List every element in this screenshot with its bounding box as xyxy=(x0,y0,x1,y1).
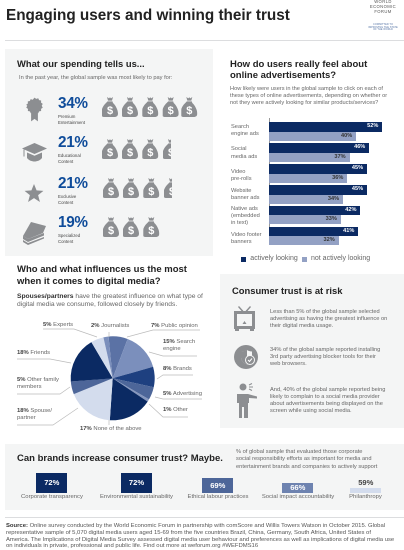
label: social media ads: media ads xyxy=(231,154,257,160)
bar: video active 45% xyxy=(269,164,367,174)
stat: 21% exclusive content: Exclusive xyxy=(58,194,76,199)
pie label: spouse: partner xyxy=(17,415,36,421)
stat box: environmental sustainability 72% xyxy=(121,473,152,493)
source note: on individuals in private, professional and public life. Find out more at weforum.org #WEFDMS16 xyxy=(6,543,258,549)
heading: spending: What our spending tells us... xyxy=(17,58,145,69)
bar: website active 45%: 45% xyxy=(352,186,363,192)
bar: search passive 40%: 40% xyxy=(341,133,352,139)
text: influences intro: digital media we consume, followed closely by friends. xyxy=(17,301,177,308)
pie chart: influences xyxy=(17,328,202,426)
caption: philanthropy: Philanthropy xyxy=(349,494,382,500)
icon row: money bags 19% xyxy=(103,217,160,237)
pie label: search engine: engine xyxy=(163,346,181,352)
bar: video passive 36%: 36% xyxy=(332,175,343,181)
stat: 34% premium entertainment xyxy=(58,95,88,125)
icon row: money bags 21% exclusive xyxy=(103,178,172,198)
text: advertising influence: their digital media usage. xyxy=(270,323,333,329)
stat: 21% educational content xyxy=(58,134,88,164)
stat: 19% specialized content: Content xyxy=(58,239,73,244)
label: native ads xyxy=(231,206,260,226)
text: brands description xyxy=(236,449,377,471)
text: brands description: % of global sample that evaluated those corporate xyxy=(236,449,362,455)
text: advertising influence xyxy=(270,309,387,329)
title: Engaging users and winning their trust xyxy=(6,7,290,24)
caption: environmental sustainability: Environmental sustainability xyxy=(100,494,173,500)
heading: consumer trust: Consumer trust is at risk xyxy=(232,285,342,296)
label: video footer banners: Video footer xyxy=(231,232,262,238)
stat box: social impact 66%: 66% xyxy=(290,483,305,492)
text: online ads intro: How likely were users in the global sample to click on each of xyxy=(230,86,383,92)
pie label: advertising: 5% Advertising xyxy=(163,390,202,396)
stat box: environmental sustainability 72%: 72% xyxy=(129,478,144,487)
stat box: corporate transparency 72%: 72% xyxy=(44,478,59,487)
icon: star xyxy=(24,184,44,202)
text: advertising influence: advertising as having the greatest influence on xyxy=(270,316,387,322)
text: spending intro: In the past year, the global sample was most likely to pay for: xyxy=(19,75,172,81)
stat box: ethical labour practices 69%: 69% xyxy=(210,481,225,490)
legend: not actively looking xyxy=(311,255,370,262)
stat: 34% premium entertainment: Entertainment xyxy=(58,120,85,125)
pie label: journalists: 2% Journalists xyxy=(91,322,129,328)
icon row: money bags 21% educational xyxy=(102,139,171,159)
stat box: corporate transparency 72% xyxy=(36,473,67,493)
icon: shield check xyxy=(234,345,258,369)
heading: online ads: online advertisements? xyxy=(230,70,336,81)
stat box: social impact 66% xyxy=(282,483,313,493)
source note: representative sample of 5,070 digital media users aged 15-69 from the five countries Brazil, China, Germany, South Africa, United States of xyxy=(6,530,371,536)
bar: native active 42% xyxy=(269,206,360,215)
bar: social passive 37% xyxy=(269,153,350,162)
label: native ads: Native ads xyxy=(231,206,258,212)
stat: 34% premium entertainment: 34% xyxy=(58,95,88,112)
bar: social active 46%: 46% xyxy=(354,144,365,150)
text: brands description: social responsibility efforts as important for media and xyxy=(236,456,372,462)
label: search engine ads: Search xyxy=(231,124,249,130)
bar: video active 45%: 45% xyxy=(352,165,363,171)
bar: native active 42%: 42% xyxy=(345,207,356,213)
stat box: ethical labour practices 69% xyxy=(202,478,233,493)
text: complaints: likely to complain to a social media provider xyxy=(270,394,380,400)
logo: World Economic Forum xyxy=(368,0,398,31)
label: video pre-rolls xyxy=(231,169,252,182)
text: advertising influence: Less than 5% of the global sample selected xyxy=(270,309,380,315)
bar: native passive 33%: 33% xyxy=(326,216,337,222)
text: influences intro xyxy=(17,293,203,308)
stat: 21% exclusive content: 21% xyxy=(58,175,88,192)
source note xyxy=(6,523,394,550)
logo: World Economic Forum: FORUM xyxy=(374,9,392,14)
bar: website active 45% xyxy=(269,185,367,195)
text: ad blocker: 3rd party advertising blocker tools for their xyxy=(270,354,376,360)
legend: actively looking xyxy=(250,255,298,262)
bar: search active 52% xyxy=(269,122,382,132)
source note: America. The Implications of Digital Media Survey assessed digital media user behaviour and preferences as well as implications of digital media use xyxy=(6,537,394,543)
text: online ads intro xyxy=(230,86,388,106)
label: native ads: (embedded xyxy=(231,213,260,219)
bar: footer active 41% xyxy=(269,227,358,236)
pie label: friends: 18% Friends xyxy=(17,350,50,356)
bar: native passive 33% xyxy=(269,215,341,224)
stat: 21% educational content: Educational xyxy=(58,153,81,158)
text: ad blocker: 34% of the global sample reported installing xyxy=(270,347,380,353)
text: complaints: about advertisements being displayed on the xyxy=(270,401,383,407)
caption: social impact accountability: Social impact accountability xyxy=(262,494,334,500)
text: complaints: screen while using social media. xyxy=(270,408,352,414)
bar: social passive 37%: 37% xyxy=(334,154,346,160)
stat: 21% exclusive content xyxy=(58,175,88,205)
caption: corporate transparency: Corporate transparency xyxy=(21,494,83,500)
bar: search active 52%: 52% xyxy=(367,123,378,129)
icon: graduation cap xyxy=(22,143,47,162)
bar: social active 46% xyxy=(269,143,369,153)
pie label: brands: 8% Brands xyxy=(163,366,192,372)
pie label: other: 1% Other xyxy=(163,407,188,413)
label: native ads: in text) xyxy=(231,220,248,226)
pie label: other family xyxy=(17,376,59,390)
text: online ads intro: not they were actively looking for similar products/services? xyxy=(230,100,378,106)
logo: World Economic Forum: OF THE WORLD xyxy=(373,28,393,31)
label: social media ads: Social xyxy=(231,146,246,152)
caption: ethical labour practices: Ethical labour practices xyxy=(188,494,248,500)
text: complaints xyxy=(270,386,385,415)
pie label: search engine xyxy=(163,339,195,352)
pie label: search engine: 15% Search xyxy=(163,339,195,345)
stat: 19% specialized content xyxy=(58,214,88,244)
text: brands description: entertainment brands and companies to actively support xyxy=(236,464,377,470)
label: search engine ads xyxy=(231,124,259,137)
heading: online ads: How do users really feel about xyxy=(230,58,367,70)
bar: search passive 40% xyxy=(269,132,356,141)
icon: television xyxy=(234,306,255,331)
logo: World Economic Forum: IMPROVING THE STATE xyxy=(368,26,398,29)
logo: World Economic Forum: ECONOMIC xyxy=(370,4,396,9)
bar: footer passive 32% xyxy=(269,236,339,245)
text: influences intro: Spouses/partners have the greatest influence on what type of xyxy=(17,293,203,300)
text: complaints: And, 40% of the global sample reported being xyxy=(270,386,385,392)
icon: person complaining xyxy=(236,382,258,418)
icon: medal xyxy=(26,98,43,122)
logo: World Economic Forum: COMMITTED TO xyxy=(373,23,393,26)
stat: 21% exclusive content: Content xyxy=(58,200,73,205)
heading: influences: when it comes to digital media? xyxy=(17,276,161,286)
pie label: spouse xyxy=(17,408,52,421)
bar: website passive 34% xyxy=(269,195,343,204)
label: video footer banners xyxy=(231,232,262,245)
label: website banner ads: Website xyxy=(231,188,251,194)
pie label: other family: members xyxy=(17,384,42,390)
stat: 21% educational content: Content xyxy=(58,159,73,164)
pie label: none of the above: 17% None of the above xyxy=(80,426,142,432)
label: video pre-rolls: Video xyxy=(231,169,245,175)
label: video footer banners: banners xyxy=(231,239,252,245)
bar: website passive 34%: 34% xyxy=(328,196,339,202)
stat box: philanthropy 59%: 59% xyxy=(358,478,373,487)
label: video pre-rolls: pre-rolls xyxy=(231,176,252,182)
text: ad blocker: web browsers. xyxy=(270,361,307,367)
icon: books xyxy=(23,222,46,245)
source note: Source: Online survey conducted by the World Economic Forum in partnership with comScore and Willis Towers Watson in October 2015. Global xyxy=(6,523,385,529)
stat: 19% specialized content: Specialized xyxy=(58,233,80,238)
label: social media ads xyxy=(231,146,257,160)
stat: 34% premium entertainment: Premium xyxy=(58,114,75,119)
stat: 21% educational content: 21% xyxy=(58,134,88,151)
stat box: philanthropy 59% xyxy=(350,478,381,493)
heading: online ads xyxy=(230,58,368,81)
stat: 19% specialized content: 19% xyxy=(58,214,88,231)
bar: footer passive 32%: 32% xyxy=(323,237,335,243)
icon row: money bags 34% xyxy=(102,97,198,117)
panel: spending xyxy=(5,49,213,256)
pie label: public opinion: 7% Public opinion xyxy=(151,322,198,328)
heading: brands: Can brands increase consumer trust? Maybe. xyxy=(17,453,223,464)
legend xyxy=(241,254,370,262)
text: ad blocker xyxy=(270,347,380,368)
bar: video passive 36% xyxy=(269,174,347,183)
heading: influences xyxy=(17,264,187,286)
bar: footer active 41%: 41% xyxy=(343,228,354,234)
pie label: experts: 5% Experts xyxy=(43,322,73,328)
pie label: other family: 5% Other family xyxy=(17,376,59,382)
label: website banner ads: banner ads xyxy=(231,195,259,201)
label: search engine ads: engine ads xyxy=(231,131,259,137)
heading: influences: Who and what influences us the most xyxy=(17,264,187,274)
label: website banner ads xyxy=(231,188,260,201)
text: online ads intro: these types of online advertisements, depending on whether or xyxy=(230,93,387,99)
bar chart: ad click likelihood xyxy=(231,118,382,245)
pie label: spouse: 18% Spouse/ xyxy=(17,408,52,414)
panel: brands xyxy=(5,444,404,510)
panel: consumer trust xyxy=(220,274,404,428)
